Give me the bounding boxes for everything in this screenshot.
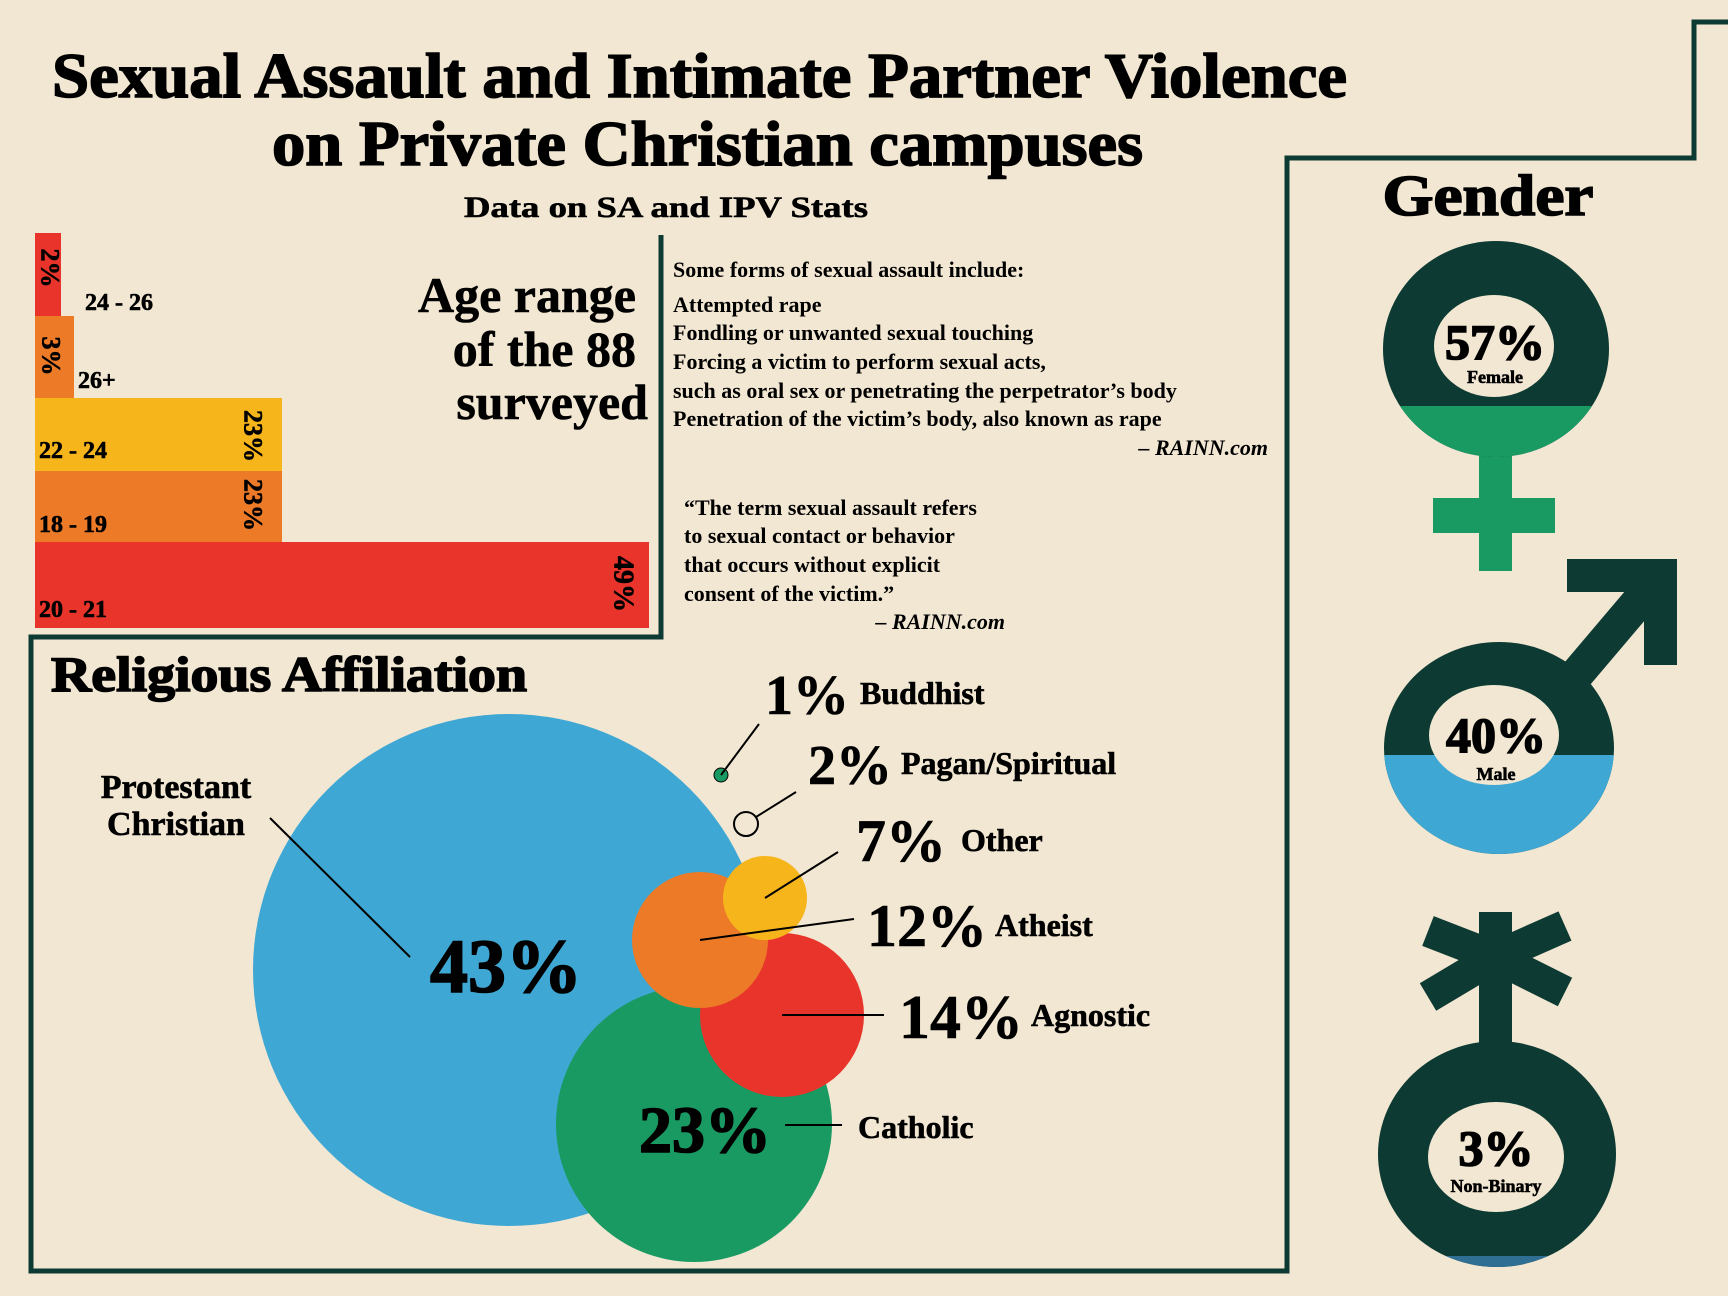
text block: forms of sexual assault: Some forms of sexual assault include:	[673, 257, 1024, 282]
age range heading: of the 88	[453, 321, 636, 377]
bubble chart: religious affiliation: Christian	[107, 806, 245, 843]
icon: female symbol 57%: Female	[1467, 367, 1523, 387]
heading: religious affiliation: Religious Affiliation	[51, 646, 527, 702]
bar chart: age range: 22 - 24	[39, 438, 107, 464]
title: on Private Christian campuses	[272, 108, 1143, 179]
bubble chart: religious affiliation: Pagan/Spiritual	[901, 745, 1116, 781]
title: Sexual Assault and Intimate Partner Violence	[52, 40, 1347, 111]
bar chart: age range: 3%	[36, 336, 66, 376]
title	[52, 40, 1347, 179]
bubble chart: religious affiliation: Other	[961, 822, 1043, 858]
quote: “The term sexual assault refers	[684, 495, 977, 520]
text block: forms of sexual assault	[673, 257, 1268, 460]
bubble chart: religious affiliation	[101, 665, 1150, 1262]
quote: to sexual contact or behavior	[684, 523, 955, 548]
bubble chart: religious affiliation: Protestant	[101, 769, 252, 806]
bar chart: age range: 24 - 26	[85, 290, 153, 316]
quote: – RAINN.com	[874, 609, 1005, 634]
icon: non-binary symbol 3%: Non-Binary	[1450, 1176, 1542, 1196]
text block: forms of sexual assault: – RAINN.com	[1137, 435, 1268, 460]
icon: male symbol 40%: Male	[1477, 764, 1515, 784]
quote: that occurs without explicit	[684, 552, 941, 577]
bubble chart: religious affiliation: 2%	[808, 735, 892, 797]
text block: forms of sexual assault: Forcing a victim to perform sexual acts,	[673, 349, 1046, 374]
bar chart: age range	[35, 233, 649, 628]
age range heading: Age range	[418, 267, 636, 323]
bubble chart: religious affiliation: Buddhist	[860, 675, 985, 711]
bubble chart: religious affiliation: 23%	[639, 1094, 771, 1167]
bar chart: age range: 2%	[36, 248, 64, 288]
bar chart: age range: 23%	[238, 479, 268, 531]
bubble chart: religious affiliation: 43%	[430, 925, 582, 1009]
bubble chart: religious affiliation: Catholic	[858, 1109, 974, 1145]
icon: female symbol 57%: 57%	[1445, 314, 1545, 370]
age range heading	[418, 267, 648, 430]
bubble chart: religious affiliation: 1%	[765, 665, 849, 727]
bar chart: age range: 49%	[608, 556, 638, 612]
text block: forms of sexual assault: Fondling or unwanted sexual touching	[673, 320, 1033, 345]
icon: non-binary symbol 3%	[1378, 912, 1616, 1267]
bubble chart: religious affiliation: Atheist	[995, 907, 1093, 943]
icon: male symbol 40%	[1384, 559, 1677, 854]
bubble chart: religious affiliation: 14%	[899, 984, 1023, 1052]
icon: female symbol 57%	[1383, 241, 1609, 571]
bar chart: age range: 20 - 21	[39, 597, 107, 623]
text block: forms of sexual assault: such as oral sex or penetrating the perpetrator’s body	[673, 378, 1177, 403]
icon: male symbol 40%: 40%	[1446, 707, 1546, 763]
bar chart: age range: 18 - 19	[39, 512, 107, 538]
text block: forms of sexual assault: Attempted rape	[673, 292, 822, 317]
bubble chart: religious affiliation: Agnostic	[1031, 997, 1150, 1033]
age range heading: surveyed	[456, 374, 648, 430]
quote: consent of the victim.”	[684, 581, 894, 606]
heading: gender: Gender	[1382, 163, 1594, 228]
icon: non-binary symbol 3%: 3%	[1458, 1120, 1534, 1176]
subtitle: Data on SA and IPV Stats	[464, 191, 868, 224]
bar chart: age range: 23%	[238, 410, 268, 462]
text block: forms of sexual assault: Penetration of the victim’s body, also known as rape	[673, 406, 1162, 431]
bubble chart: religious affiliation: 12%	[867, 893, 987, 959]
bubble chart: religious affiliation: 7%	[856, 808, 946, 874]
bar chart: age range: 26+	[78, 368, 116, 394]
quote	[684, 495, 1005, 634]
